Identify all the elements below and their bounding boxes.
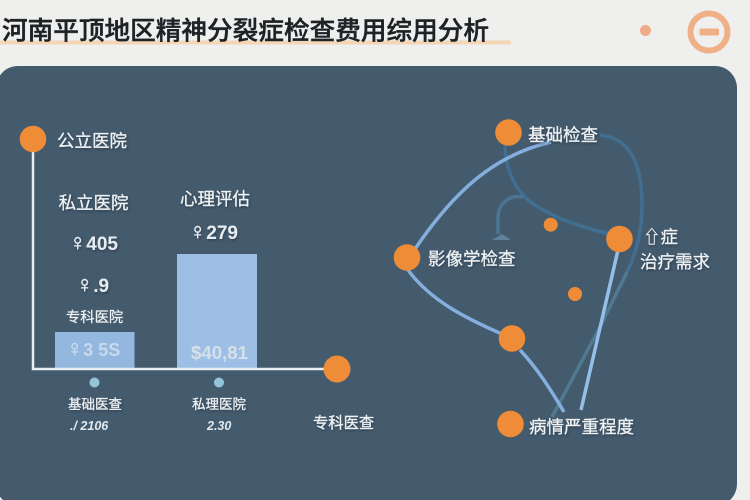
dark connector: outer loop xyxy=(600,135,642,290)
node: lower middle xyxy=(499,325,525,352)
chart axes xyxy=(33,139,330,369)
label: specialist hospital: 专科医院 xyxy=(66,309,123,326)
arrowhead xyxy=(492,234,511,240)
bar: left short xyxy=(55,332,134,369)
node: severity xyxy=(497,411,524,437)
label: severity: 病情严重程度 xyxy=(529,417,634,437)
light connector: imaging to base check xyxy=(415,142,551,249)
small dot: upper xyxy=(544,218,558,232)
label: private hospital: 私立医院 xyxy=(58,193,128,213)
axis node: top xyxy=(20,126,46,152)
panel: bar chart xyxy=(20,126,374,433)
marker dot: first category xyxy=(90,378,100,388)
label: treatment need: 治疗需求 xyxy=(640,252,710,272)
value: basic check category: ./ 2106 xyxy=(70,419,109,433)
value: secondary: ♀.9 xyxy=(76,271,109,297)
label: symptom: ⇧症 xyxy=(643,227,678,247)
marker dot: second category xyxy=(214,378,224,388)
label: public hospital: 公立医院 xyxy=(57,131,127,151)
decorative header dot xyxy=(640,25,651,36)
value: private category: 2.30 xyxy=(206,419,231,433)
panel: network diagram xyxy=(394,119,710,437)
title: 河南平顶地区精神分裂症检查费用综用分析 xyxy=(2,18,489,46)
dark arrow branch xyxy=(498,197,523,234)
label: private category: 私理医院 xyxy=(192,397,246,412)
light connector: imaging to lower node xyxy=(408,270,502,334)
value: private hospital: ♀405 xyxy=(69,229,118,255)
label: basic check category: 基础医查 xyxy=(68,396,122,412)
value: psychological assessment: ♀279 xyxy=(189,218,238,244)
light connector: treatment to bottom xyxy=(581,250,618,410)
node: basic check xyxy=(495,119,522,146)
light connector: lower node to bottom xyxy=(520,350,564,412)
bar: tall xyxy=(177,254,257,369)
axis node: right xyxy=(324,356,350,382)
value: tall bar: $40,81 xyxy=(191,342,248,363)
node: imaging xyxy=(394,244,420,271)
label: imaging check: 影像学检查 xyxy=(428,249,516,269)
dark connector: base check to treatment xyxy=(505,143,610,234)
title underline xyxy=(0,40,509,44)
faded connector xyxy=(552,272,627,417)
icon: minus in ring xyxy=(690,14,728,50)
label: psychological assessment: 心理评估 xyxy=(180,189,250,209)
value: left bar: ♀3 5S xyxy=(66,335,120,361)
small dot: lower xyxy=(568,287,582,301)
node: treatment xyxy=(606,226,633,252)
label: basic check: 基础检查 xyxy=(528,125,598,145)
label: specialist check: 专科医查 xyxy=(313,415,374,432)
